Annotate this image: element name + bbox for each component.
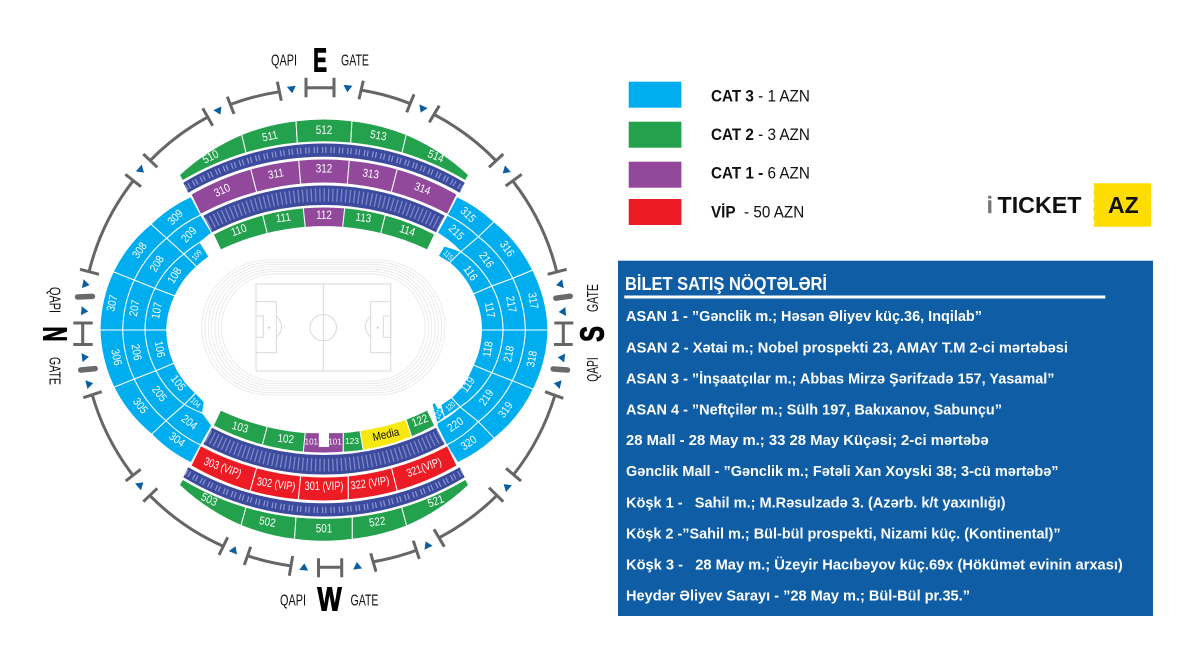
section 110: 110: [229, 222, 249, 239]
legend item CAT 1: [629, 162, 810, 188]
legend item CAT 3: [629, 82, 810, 108]
section 320: 320: [459, 433, 479, 453]
legend item CAT 2: CAT 2 - 3 AZN: [711, 127, 810, 144]
section 121: [432, 402, 445, 423]
section 321 VIP: [392, 446, 457, 491]
section 116: [449, 252, 492, 294]
section 314: [391, 169, 457, 214]
gate label E: GATE: [341, 51, 369, 69]
upper inner seating band, blue: [203, 185, 445, 232]
section 302 VIP: 302 (VIP): [256, 476, 296, 494]
section 208: [134, 238, 184, 288]
section 503: 503: [199, 491, 219, 509]
section 105: [156, 363, 196, 404]
section 309: [151, 197, 201, 238]
sales point rows: ASAN 3 - ”İnşaatçılar m.; Abbas Mirzə Şərifzadə 157, Yasamal”: [626, 370, 1054, 387]
logo iTicket AZ: AZ: [1108, 192, 1139, 218]
section 117: 117: [482, 301, 497, 319]
section 315: [447, 197, 494, 237]
section 319: [478, 381, 533, 438]
legend item CAT 3: CAT 3 - 1 AZN: [711, 88, 810, 106]
section 322 VIP: 322 (VIP): [350, 475, 390, 493]
section 511: 511: [261, 129, 279, 145]
section 522: 522: [368, 515, 386, 530]
section 123: 123: [345, 437, 359, 446]
panel heading: BİLET SATIŞ NÖQTƏLƏRİ: [625, 274, 827, 294]
gate label N: GATE: [46, 357, 64, 385]
gate label W: QAPI: [280, 591, 306, 609]
section 311: 311: [267, 167, 285, 182]
upper seating band, blue: [183, 143, 465, 193]
legend: [629, 82, 810, 225]
section 106: 106: [152, 340, 167, 359]
section 118: 118: [481, 340, 496, 358]
section 308: 308: [130, 240, 150, 261]
section 108: [155, 254, 197, 296]
gate label N: QAPI: [46, 287, 64, 313]
section 102: [262, 426, 305, 452]
section 304: [152, 421, 201, 463]
media section: Media: [371, 426, 401, 444]
logo iTicket AZ: [987, 183, 1151, 227]
section 312: 312: [316, 163, 332, 176]
section 318: [512, 330, 548, 389]
section 115: 115: [441, 248, 455, 262]
gate label N: [36, 287, 74, 385]
section 510: 510: [200, 148, 221, 167]
section 511: [242, 121, 297, 153]
section 109: 109: [189, 248, 204, 262]
section 120: [441, 398, 460, 418]
section 307: 307: [105, 294, 121, 313]
section 303 VIP: 303 (VIP): [202, 456, 243, 481]
gate label W: GATE: [351, 591, 378, 609]
sales point rows: [626, 309, 1123, 604]
sales point rows: ASAN 4 - ”Neftçilər m.; Sülh 197, Bakıxanov, Sabunçu”: [626, 402, 1002, 418]
section 102: 102: [277, 432, 295, 446]
section 121: 121: [433, 408, 445, 420]
section 218: 218: [502, 345, 517, 363]
section 105: 105: [168, 373, 188, 394]
gate label E: QAPI: [271, 51, 297, 69]
section 104: 104: [188, 395, 203, 410]
section 215: [437, 215, 478, 252]
section 522: [352, 507, 407, 539]
section 503: [179, 479, 246, 526]
section 206: 206: [128, 343, 144, 362]
lower inner seating band, blue: [203, 428, 445, 475]
section 119: 119: [459, 375, 478, 395]
section 307: [100, 272, 134, 330]
section 206: [123, 330, 156, 379]
media section: [360, 419, 412, 450]
section 313: [347, 160, 397, 192]
section 317: 317: [525, 291, 540, 310]
gate label N: N: [36, 326, 74, 342]
gate label W: W: [317, 582, 342, 618]
section 108: 108: [165, 265, 185, 286]
section 205: 205: [149, 384, 169, 404]
sales point rows: ASAN 2 - Xətai m.; Nobel prospekti 23, AMAY T.M 2-ci mərtəbəsi: [626, 340, 1068, 356]
section 204: [166, 404, 212, 445]
section 119: [452, 365, 492, 407]
section 113: [343, 208, 385, 234]
sales point rows: 28 Mall - 28 May m.; 33 28 May Küçəsi; 2-ci mərtəbə: [626, 433, 989, 449]
section 309: 309: [165, 207, 186, 228]
stadium map: [36, 41, 612, 618]
section 317: [513, 270, 548, 330]
section 316: [478, 222, 533, 278]
section 216: 216: [476, 250, 496, 270]
section 514: 514: [426, 148, 446, 166]
section 311: [251, 160, 301, 192]
section 216: [461, 237, 513, 286]
section 120: 120: [445, 401, 457, 413]
gate label S: [575, 284, 612, 382]
section 113: 113: [355, 211, 372, 226]
gate capsules: [78, 296, 570, 370]
section 114: [381, 215, 435, 250]
gate label S: GATE: [584, 284, 601, 312]
section 123: [343, 431, 363, 452]
section 107: [145, 288, 175, 330]
section 320: [447, 422, 494, 463]
section 109: [184, 242, 209, 267]
section 101: 101: [305, 438, 319, 446]
section 512: 512: [316, 124, 332, 137]
section 208: 208: [147, 254, 167, 274]
section 218: [492, 330, 525, 381]
section 219: [460, 373, 512, 422]
section 303 VIP: [191, 446, 257, 491]
section 306: 306: [108, 348, 124, 367]
gate ring walls: [73, 78, 573, 577]
section 111: 111: [275, 211, 292, 226]
section 310: [191, 169, 257, 214]
sales point rows: Köşk 1 - Sahil m.; M.Rəsulzadə 3. (Azərb. k/t yaxınlığı): [626, 495, 1006, 511]
section 314: 314: [412, 180, 432, 198]
gate label E: [271, 41, 369, 79]
legend item VIP: VİP - 50 AZN: [711, 203, 804, 221]
sales point rows: Gənclik Mall - ”Gənclik m.; Fətəli Xan Xoyski 38; 3-cü mərtəbə”: [626, 464, 1058, 480]
section 302 VIP: [250, 468, 301, 500]
section 112: [303, 207, 345, 227]
section 301 VIP: 301 (VIP): [305, 481, 343, 493]
section 501: [294, 517, 352, 541]
sales point rows: Köşk 3 - 28 May m.; Üzeyir Hacıbəyov küç.69x (Hökümət evinin arxası): [626, 556, 1123, 573]
section 501: 501: [316, 523, 332, 536]
section 204: 204: [179, 413, 199, 433]
section 315: 315: [457, 205, 478, 225]
sales point rows: Köşk 2 -”Sahil m.; Bül-bül prospekti, Nizami küç. (Kontinental)”: [626, 526, 1061, 542]
section 220: 220: [445, 415, 466, 435]
section 217: 217: [503, 295, 518, 314]
section 312: [299, 159, 349, 184]
section 304: 304: [166, 430, 187, 450]
section 301 VIP: [298, 476, 348, 501]
section 115: [438, 246, 461, 263]
section 321 VIP: 321(VIP): [405, 456, 443, 480]
section 112: 112: [316, 209, 332, 222]
section 103: [213, 410, 267, 445]
section 101: 101: [328, 438, 342, 446]
section 512: [296, 119, 352, 143]
section 209: [167, 215, 212, 254]
section 205: [134, 371, 184, 421]
gate entry arrows: [81, 85, 566, 571]
section 106: [145, 330, 174, 371]
section 513: 513: [369, 128, 388, 144]
section 319: 319: [496, 400, 516, 420]
gate label S: S: [575, 326, 612, 342]
gate label E: E: [313, 41, 327, 79]
section 122: 122: [410, 412, 430, 430]
section 101: [303, 433, 343, 453]
section 308: [113, 224, 167, 280]
legend item CAT 2: [629, 122, 810, 148]
section 318: 318: [525, 350, 540, 368]
section 104: [184, 393, 204, 413]
section 217: [492, 278, 525, 330]
legend item CAT 1: CAT 1 - 6 AZN: [711, 165, 810, 182]
section 220: [437, 407, 478, 445]
gate label W: [280, 582, 378, 618]
section 117: [473, 286, 503, 330]
section 207: 207: [127, 299, 143, 318]
section 111: [263, 208, 305, 234]
panel: ticket sales points: [618, 261, 1153, 616]
section 107: 107: [150, 301, 165, 320]
section 219: 219: [477, 387, 497, 408]
section 513: [351, 121, 406, 153]
section 502: 502: [258, 515, 277, 530]
section 118: [473, 330, 503, 373]
section 122: [406, 410, 435, 437]
gate label S: QAPI: [584, 357, 601, 382]
section 110: [213, 215, 267, 250]
section 510: [179, 134, 246, 181]
section 322 VIP: [348, 468, 397, 500]
section 310: 310: [212, 181, 233, 200]
section 316: 316: [497, 239, 517, 259]
logo iTicket AZ: i: [987, 192, 992, 218]
section 514: [402, 134, 469, 181]
logo iTicket AZ: TICKET: [998, 192, 1082, 218]
section 215: 215: [446, 222, 466, 243]
section 209: 209: [179, 225, 200, 245]
heading underline: [624, 296, 1105, 298]
section 521: [402, 479, 469, 526]
section 521: 521: [426, 493, 446, 511]
pitch and running track: [202, 260, 445, 395]
section 502: [241, 507, 296, 539]
sales point rows: Heydər Əliyev Sarayı - ”28 May m.; Bül-Bül pr.35.”: [626, 588, 970, 604]
sales point rows: ASAN 1 - ”Gənclik m.; Həsən Əliyev küç.36, Inqilab”: [626, 309, 982, 325]
section 305: 305: [130, 396, 150, 416]
section 306: [100, 330, 134, 387]
section 103: 103: [230, 419, 250, 436]
section 305: [114, 379, 166, 434]
section 313: 313: [362, 167, 380, 182]
section 114: 114: [398, 223, 417, 239]
legend item VIP: [629, 199, 804, 225]
lower seating band, blue: [183, 467, 465, 517]
section 116: 116: [460, 263, 480, 283]
section 207: [123, 280, 155, 330]
